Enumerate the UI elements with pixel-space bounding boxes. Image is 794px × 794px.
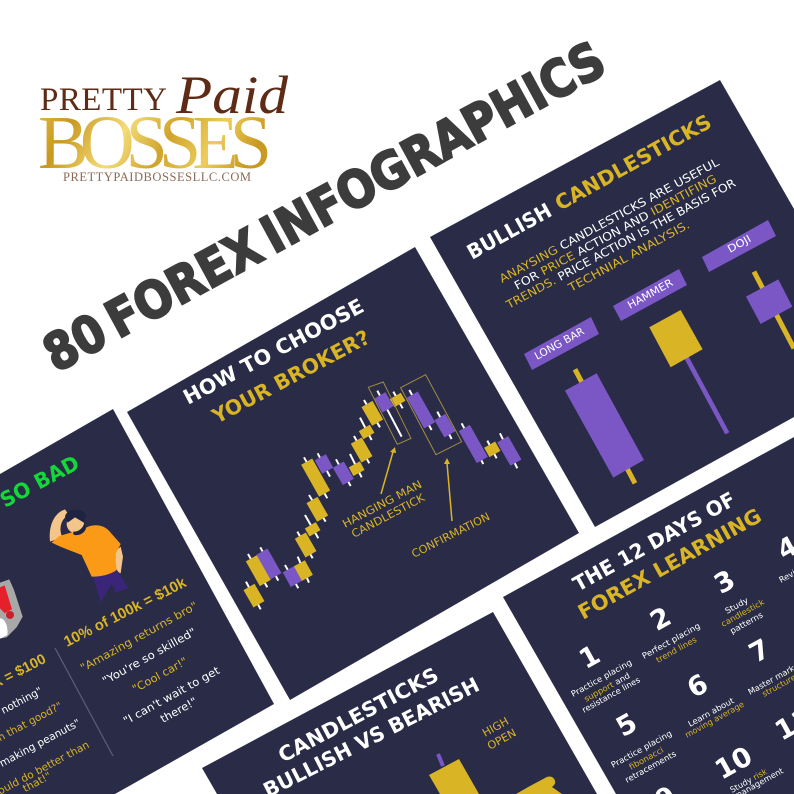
heading: how to choose your broker: HOW TO CHOOSE xyxy=(179,294,368,409)
text: day descriptions xyxy=(569,562,794,794)
text: right column amount: 10% of 100k = $10k xyxy=(61,574,190,651)
text: day descriptions: trend lines xyxy=(654,634,698,665)
text: day descriptions: Study risk xyxy=(728,766,769,794)
logo: Pretty Paid Bosses: Paid xyxy=(175,65,289,125)
panel: 12 days of forex learning xyxy=(503,437,794,794)
arrow: to hanging man xyxy=(381,447,396,494)
text: left column quotes xyxy=(0,685,91,794)
text: day descriptions: Learn about xyxy=(686,695,736,729)
text: day descriptions: retracements xyxy=(623,748,678,785)
text: day descriptions: candlestick xyxy=(719,597,766,629)
text: right column quotes: "Cool car!" xyxy=(130,655,190,696)
logo: Pretty Paid Bosses: PRETTY xyxy=(40,82,167,118)
label: doji: DOJI xyxy=(726,233,753,256)
heading: how to choose your broker: YOUR BROKER? xyxy=(207,325,374,429)
text: day descriptions: fibonacci xyxy=(627,745,665,772)
text: day descriptions: Perfect placing xyxy=(640,620,702,661)
text: right column quotes xyxy=(78,599,223,728)
text: right column quotes: "I can't wait to get xyxy=(121,664,223,728)
icon: gold pile xyxy=(516,777,562,794)
candle: doji xyxy=(746,272,794,348)
label: long bar: LONG BAR xyxy=(533,325,587,363)
text: day descriptions: Practice placing xyxy=(569,657,633,699)
text: description: TRENDS. PRICE ACTION IS THE BASIS FOR xyxy=(503,176,738,312)
text: description: ANAYSING CANDLESTICKS ARE USEFUL xyxy=(497,155,722,286)
text: day descriptions: moving average xyxy=(683,699,746,740)
heading: the 12 days of forex learning: THE 12 DAYS OF xyxy=(569,487,740,596)
text: day descriptions: Practice placing xyxy=(609,728,673,770)
numbers: 2 xyxy=(645,601,677,638)
logo: Pretty Paid Bosses: PRETTYPAIDBOSSESLLC.COM xyxy=(63,170,251,184)
main title: 80 FOREX INFOGRAPHICS xyxy=(34,31,615,384)
heading: bullish candlesticks: CANDLESTICKS xyxy=(551,110,715,215)
label: long bar xyxy=(524,317,599,370)
text: right column quotes: there!" xyxy=(158,695,199,726)
heading: candlesticks bullish vs bearish: CANDLESTICKS xyxy=(274,663,443,767)
text: day descriptions: Study xyxy=(723,595,750,616)
heading: the 12 days of forex learning: FOREX LEARNING xyxy=(574,504,766,624)
text: day descriptions: patterns xyxy=(728,610,764,636)
panel: how to choose your broker xyxy=(127,247,579,700)
icon: confused man xyxy=(50,509,128,603)
numbers xyxy=(574,530,794,794)
chart: candlesticks xyxy=(246,375,517,609)
label: hanging man candlestick: HANGING MAN xyxy=(340,478,424,531)
numbers: 6 xyxy=(682,668,714,705)
label: doji xyxy=(702,220,776,272)
label: hammer xyxy=(613,269,687,321)
numbers: 5 xyxy=(611,707,643,744)
label: hanging man candlestick: CANDLESTICK xyxy=(349,491,428,541)
text: right column quotes: "You're so skilled" xyxy=(100,625,198,688)
panel: candlesticks bullish vs bearish xyxy=(202,612,597,794)
icon: exclamation mark xyxy=(0,579,23,639)
text: description: FOR PRICE ACTION AND IDENTIFING xyxy=(512,172,719,293)
numbers: 7 xyxy=(744,633,776,670)
heading: bullish candlesticks xyxy=(463,110,715,264)
label: high open: HIGH xyxy=(480,715,511,740)
panel: bullish candlesticks xyxy=(430,80,794,527)
text: right column quotes: "Amazing returns bro" xyxy=(78,599,200,675)
candle: bullish xyxy=(429,754,479,794)
panel: so bad xyxy=(0,409,274,794)
candle: hammer xyxy=(649,310,727,433)
numbers: 3 xyxy=(709,564,741,601)
candle: long bar xyxy=(565,369,644,483)
logo: Pretty Paid Bosses: BOSSES xyxy=(38,101,272,185)
arrow: to confirmation xyxy=(444,458,452,521)
text: day descriptions: support and xyxy=(582,670,632,704)
logo: Pretty Paid Bosses xyxy=(38,65,289,185)
label: high open xyxy=(480,715,519,753)
numbers: 10 xyxy=(710,741,758,786)
label: hammer: HAMMER xyxy=(626,277,675,312)
heading: bullish candlesticks: BULLISH xyxy=(463,198,556,264)
text: description: TECHNIAL ANALYSIS. xyxy=(565,217,692,295)
text: day descriptions: resistance lines xyxy=(580,674,642,715)
label: confirmation: CONFIRMATION xyxy=(409,510,492,561)
numbers: 1 xyxy=(574,639,606,676)
label: high open: OPEN xyxy=(485,726,519,753)
